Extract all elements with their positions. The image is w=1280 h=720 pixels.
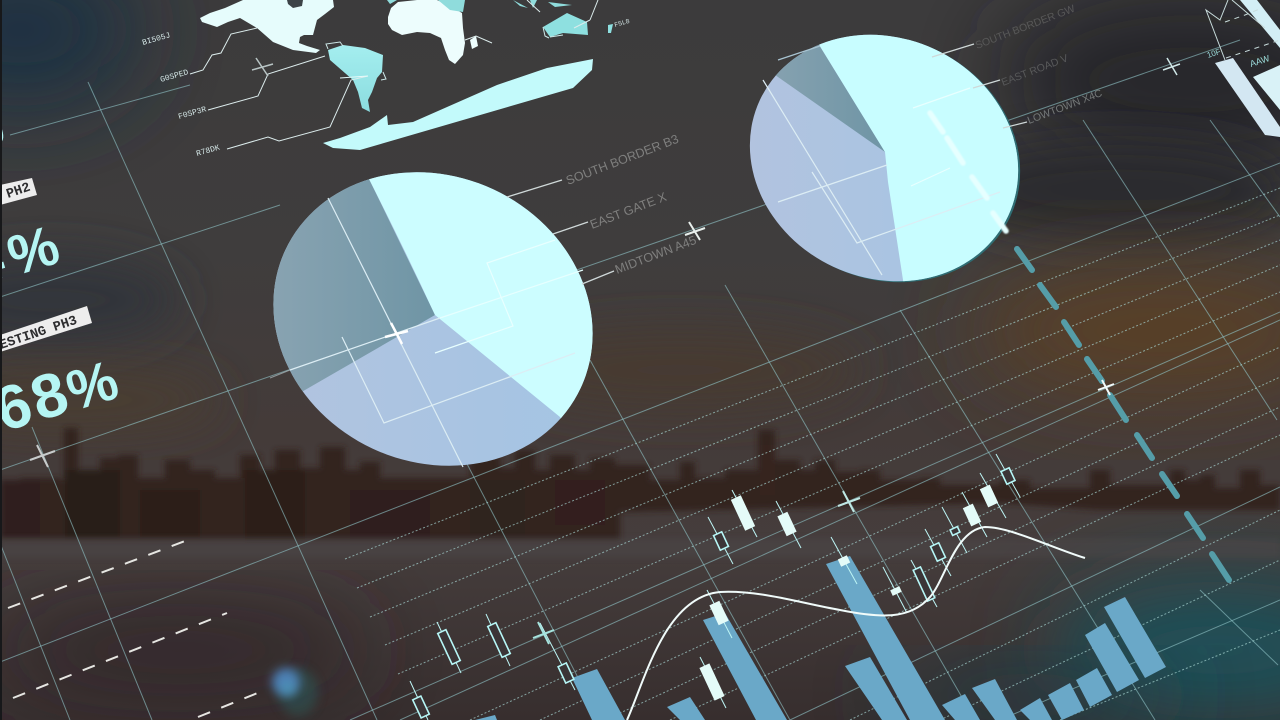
pie 1 slice: large light: [369, 172, 593, 418]
pie chart 2: [750, 4, 1102, 282]
map labels: F0SP3R: [177, 105, 208, 122]
map: South America: [328, 45, 383, 112]
mini chart labels: 10F: [1206, 47, 1222, 60]
mini bar 2: [1253, 65, 1280, 110]
pie 2 leader lines: [932, 44, 1027, 128]
horizon water band: [0, 538, 1280, 558]
pie 2 overlay grid lines: [763, 46, 1000, 275]
pie 1 labels: SOUTH BORDER B3: [564, 132, 681, 188]
map: Madagascar: [470, 36, 478, 49]
pie 1 labels: EAST GATE X: [588, 190, 669, 232]
pie 2 labels: LOWTOWN X4C: [1026, 87, 1104, 127]
value: PH3 percentage: [0, 348, 125, 445]
candlestick chart: [410, 454, 1020, 720]
map: Antarctica: [323, 59, 593, 150]
top right mini chart: [1206, 0, 1280, 137]
pie 2 labels: EAST ROAD V: [1000, 52, 1070, 89]
pie chart 1: [250, 132, 698, 480]
map labels: G0SPED: [159, 68, 190, 85]
skyline silhouette: [0, 428, 1280, 540]
white trend curve: [627, 527, 1085, 720]
map: corner brackets: [326, 27, 563, 80]
left column: percentage readouts: [0, 110, 125, 445]
white dashed guide lines, bottom left: [8, 538, 260, 717]
pie 2 slice: grey: [776, 44, 885, 152]
map: Australia: [543, 13, 588, 37]
top right mini chart: AAW: [1249, 53, 1271, 69]
pie 2 dashes over light slice: [930, 113, 1006, 231]
map labels: R78DK: [195, 144, 221, 159]
pie 1 labels: [564, 132, 698, 277]
map: Europe fragments: [387, 0, 465, 12]
tag: testing PH3: ESTING PH3: [0, 314, 79, 354]
map: leader lines: [190, 0, 598, 149]
tag: testing PH2: [0, 178, 37, 205]
mini bar 1: [1215, 58, 1280, 137]
pie 1 leader lines: [507, 180, 614, 284]
mini bar 3: [1240, 0, 1280, 48]
lens flare: [272, 668, 318, 716]
pie 2 labels: [974, 3, 1104, 127]
map labels: BI505J: [141, 31, 172, 48]
value: PH3 percentage: %: [59, 348, 125, 422]
map: Asia islands: [513, 0, 572, 8]
thick dashed teal diagonal: [1017, 249, 1229, 580]
value: PH2 percentage: %: [0, 213, 66, 287]
map labels: [141, 18, 631, 159]
bar chart: [475, 556, 1166, 720]
map: Hudson Bay: [287, 0, 303, 8]
pie 2 slice: periwinkle: [745, 30, 1025, 290]
mini dashed lines and zigzag: [1206, 0, 1280, 60]
pie 2 labels: SOUTH BORDER GW: [974, 3, 1077, 52]
pie 1 slice: lower periwinkle: [273, 172, 593, 466]
pie 2 teal rim: [711, 0, 1061, 326]
hollow candles: [413, 468, 1015, 718]
pie 1 labels: MIDTOWN A45: [613, 233, 698, 277]
pie 1 slice: upper grey: [273, 179, 435, 391]
filled candles: [699, 485, 998, 701]
tag: testing PH2: PH2: [5, 181, 33, 203]
map: North America: [200, 0, 334, 53]
world map with leader lines: [141, 0, 631, 159]
map labels: F5L8: [614, 18, 631, 29]
map: New Zealand: [608, 24, 613, 33]
pie 2 slice: large light: [819, 34, 1018, 282]
crosshair markers: [30, 58, 1180, 644]
candle wicks: [410, 454, 1020, 720]
map: Africa: [388, 0, 465, 64]
grid: dotted perspective lines: [345, 188, 1280, 720]
pie 1 overlay grid lines: [270, 198, 583, 467]
left screen edge: [0, 0, 2, 720]
